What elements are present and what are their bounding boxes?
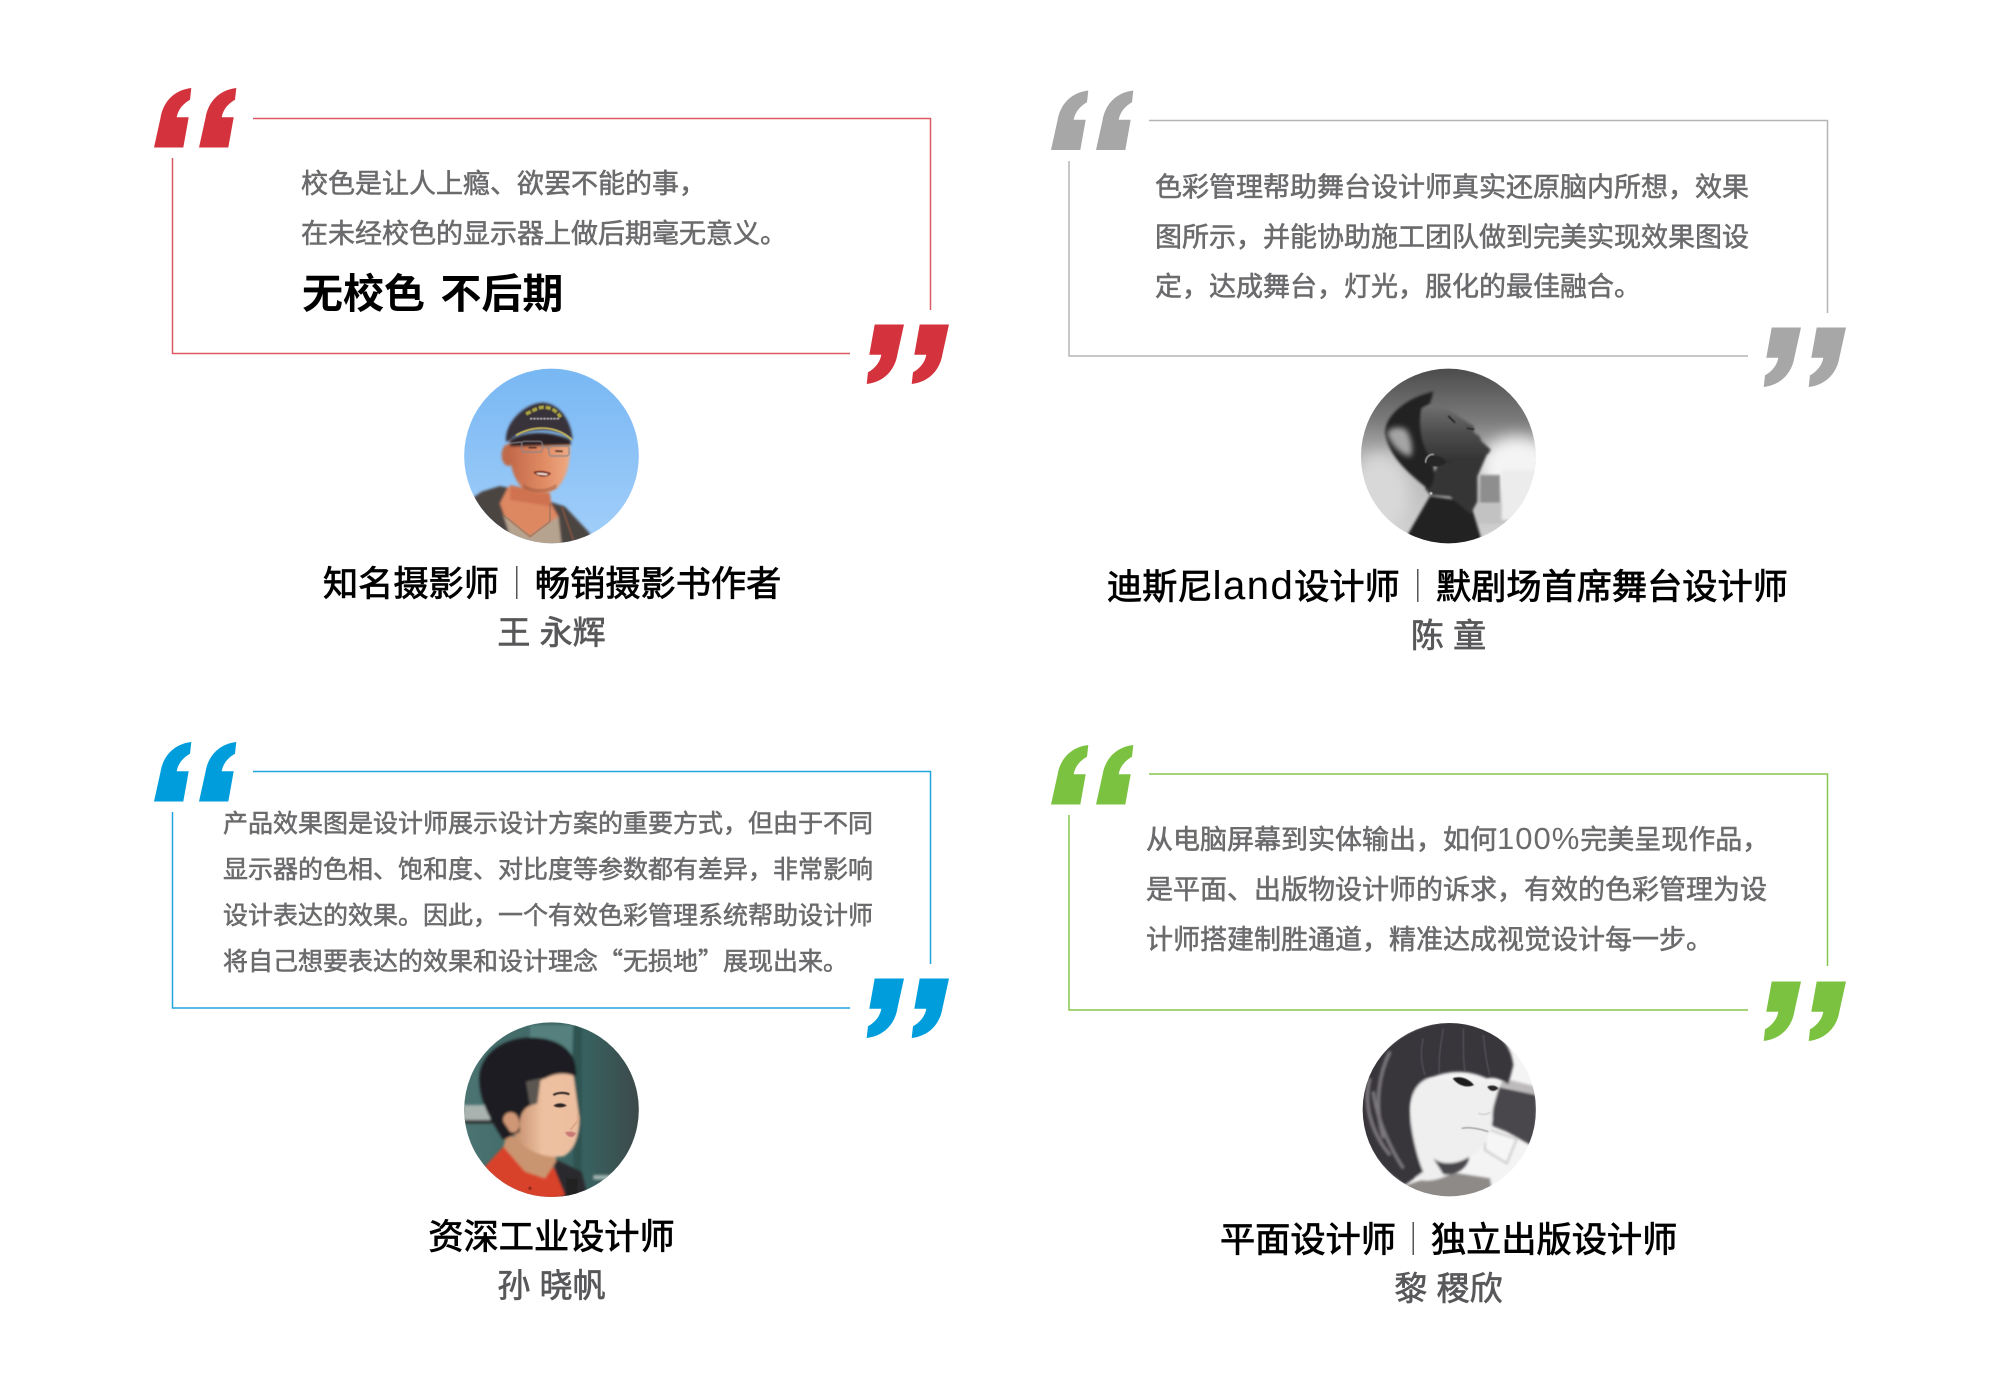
avatar: man looking up bbox=[1361, 368, 1536, 544]
icon: opening quote mark bbox=[1051, 745, 1133, 804]
quote text: 计师搭建制胜通道，精准达成视觉设计每一步。 bbox=[1146, 925, 1713, 955]
quote text: 定，达成舞台，灯光，服化的最佳融合。 bbox=[1155, 272, 1641, 302]
role line bbox=[1220, 1221, 1677, 1260]
icon: opening quote mark bbox=[1051, 90, 1133, 150]
panel: Chen Tong testimonial bbox=[1051, 90, 1846, 654]
quote frame bbox=[1069, 120, 1828, 356]
quote frame bbox=[1069, 774, 1828, 1010]
avatar: woman with fringe bbox=[1362, 1023, 1536, 1196]
role line: 平面设计师 bbox=[1220, 1221, 1396, 1260]
icon: opening quote mark bbox=[154, 742, 236, 802]
person name: 王 永辉 bbox=[497, 614, 606, 651]
panel: Li Jixin testimonial bbox=[1051, 745, 1846, 1307]
person name: 孙 晓帆 bbox=[497, 1267, 606, 1304]
avatar: young man in red shirt bbox=[460, 1018, 643, 1202]
quote text: 是平面、出版物设计师的诉求，有效的色彩管理为设 bbox=[1146, 875, 1767, 905]
icon: closing quote mark bbox=[1764, 328, 1846, 387]
icon: opening quote mark bbox=[154, 88, 236, 148]
icon: closing quote mark bbox=[867, 324, 949, 384]
quote text: 从电脑屏幕到实体输出，如何100%完美呈现作品， bbox=[1146, 821, 1769, 856]
quote text: 将自己想要表达的效果和设计理念“无损地”展现出来。 bbox=[223, 942, 848, 978]
quote text bbox=[301, 169, 787, 317]
quote text: 色彩管理帮助舞台设计师真实还原脑内所想，效果 bbox=[1155, 172, 1749, 202]
quote frame bbox=[172, 118, 930, 354]
role line: 畅销摄影书作者 bbox=[535, 565, 781, 604]
quote text bbox=[1155, 172, 1749, 302]
quote text: 显示器的色相、饱和度、对比度等参数都有差异，非常影响 bbox=[223, 856, 873, 884]
person name: 陈 童 bbox=[1411, 617, 1486, 654]
quote text bbox=[1146, 821, 1769, 955]
quote text bbox=[223, 810, 873, 978]
quote frame bbox=[172, 772, 930, 1008]
icon: closing quote mark bbox=[867, 978, 949, 1038]
avatar: man in cap bbox=[460, 367, 643, 550]
quote text: 设计表达的效果。因此，一个有效色彩管理系统帮助设计师 bbox=[223, 902, 873, 930]
panel: Wang Yonghui testimonial bbox=[154, 88, 949, 651]
quote text: 校色是让人上瘾、欲罢不能的事， bbox=[301, 169, 706, 199]
role line: 独立出版设计师 bbox=[1431, 1221, 1677, 1260]
role line: 资深工业设计师 bbox=[428, 1218, 675, 1257]
quote text: 图所示，并能协助施工团队做到完美实现效果图设 bbox=[1155, 222, 1749, 252]
icon: closing quote mark bbox=[1764, 982, 1846, 1041]
quote text: 在未经校色的显示器上做后期毫无意义。 bbox=[301, 219, 787, 249]
role line bbox=[1107, 564, 1788, 608]
role line: 默剧场首席舞台设计师 bbox=[1436, 568, 1788, 607]
quote text: 无校色 不后期 bbox=[302, 271, 563, 317]
quote text: 产品效果图是设计师展示设计方案的重要方式，但由于不同 bbox=[223, 810, 873, 838]
panel: Sun Xiaofan testimonial bbox=[154, 742, 949, 1304]
role line: 迪斯尼land设计师 bbox=[1107, 564, 1400, 608]
person name: 黎 稷欣 bbox=[1394, 1270, 1503, 1307]
role line: 知名摄影师 bbox=[323, 565, 499, 604]
role line bbox=[323, 565, 781, 604]
